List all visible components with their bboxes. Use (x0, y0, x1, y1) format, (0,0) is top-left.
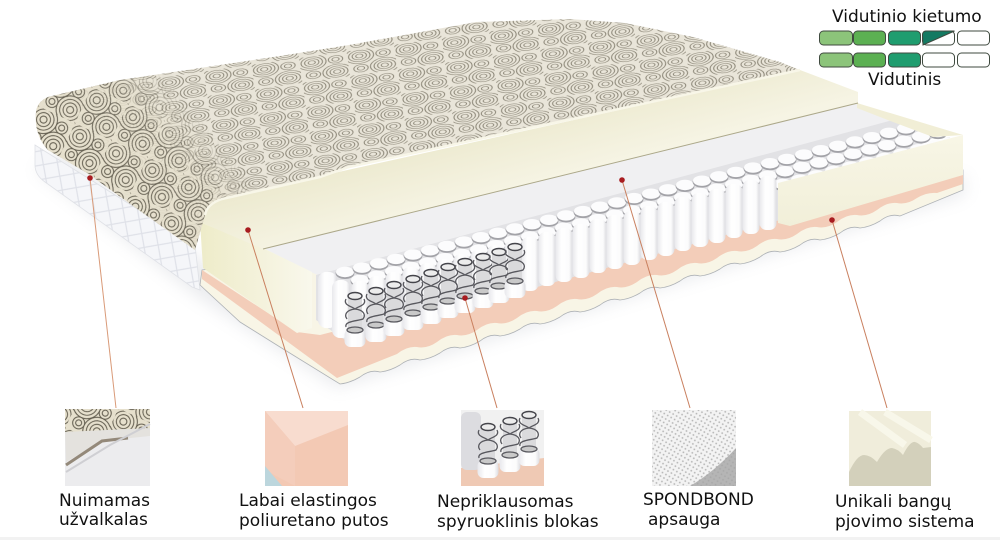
leader line: springs (462, 295, 497, 408)
label: apsauga (648, 510, 720, 530)
quilted white side panel (35, 145, 200, 290)
item: removable cover (59, 409, 150, 530)
label: SPONDBOND (643, 490, 754, 510)
thumbnail: mesh fabric (652, 410, 736, 486)
label (835, 492, 975, 532)
left foam block (200, 222, 312, 333)
label: užvalkalas (59, 510, 148, 530)
item: polyurethane foam (239, 411, 389, 531)
second row pockets behind coils (352, 241, 522, 315)
thumbnail: foam cube (265, 411, 348, 486)
leader line: cover (87, 175, 116, 408)
spring tops rows (336, 124, 950, 284)
wave cut cream layer (200, 170, 963, 384)
thumbnail: wave foam (849, 411, 931, 486)
mattress cross-section (35, 19, 1000, 384)
label: Unikali bangų (835, 492, 952, 512)
upper foam strip (200, 70, 858, 249)
label (59, 491, 150, 530)
soft shadow under mattress (36, 150, 965, 388)
label (437, 492, 599, 532)
grey interior behind the springs (316, 120, 935, 340)
label: Labai elastingos (239, 491, 377, 511)
removable patterned cover (36, 19, 800, 250)
right foam block (778, 103, 963, 226)
label: poliuretano putos (239, 511, 389, 531)
leader line: spunbond (619, 177, 690, 408)
thumbnail: zipper (65, 409, 150, 486)
firmness scale row 2 (820, 53, 990, 67)
label: Nepriklausomas (437, 492, 574, 512)
label: pjovimo sistema (835, 512, 975, 532)
firmness legend (820, 7, 990, 90)
item: pocket springs (437, 410, 599, 532)
spunbond-covered spring block top (263, 103, 1000, 347)
legend value: Vidutinis (868, 70, 941, 90)
pink elastic polyurethane foam base (202, 173, 963, 378)
label (239, 491, 389, 531)
firmness scale row 1 (820, 31, 990, 45)
thumbnail: springs (461, 410, 544, 486)
label (643, 490, 754, 530)
legend heading: Vidutinio kietumo (832, 7, 982, 27)
label: spyruoklinis blokas (437, 512, 599, 532)
leader line: wave cut (829, 217, 887, 408)
exposed steel coil springs (344, 244, 526, 347)
background strip (0, 537, 1000, 540)
label: Nuimamas (59, 491, 150, 511)
leader line: foam (245, 227, 303, 408)
item: wave cut system (835, 411, 975, 532)
item: spunbond protection (643, 410, 754, 530)
white pocket columns (318, 176, 776, 338)
